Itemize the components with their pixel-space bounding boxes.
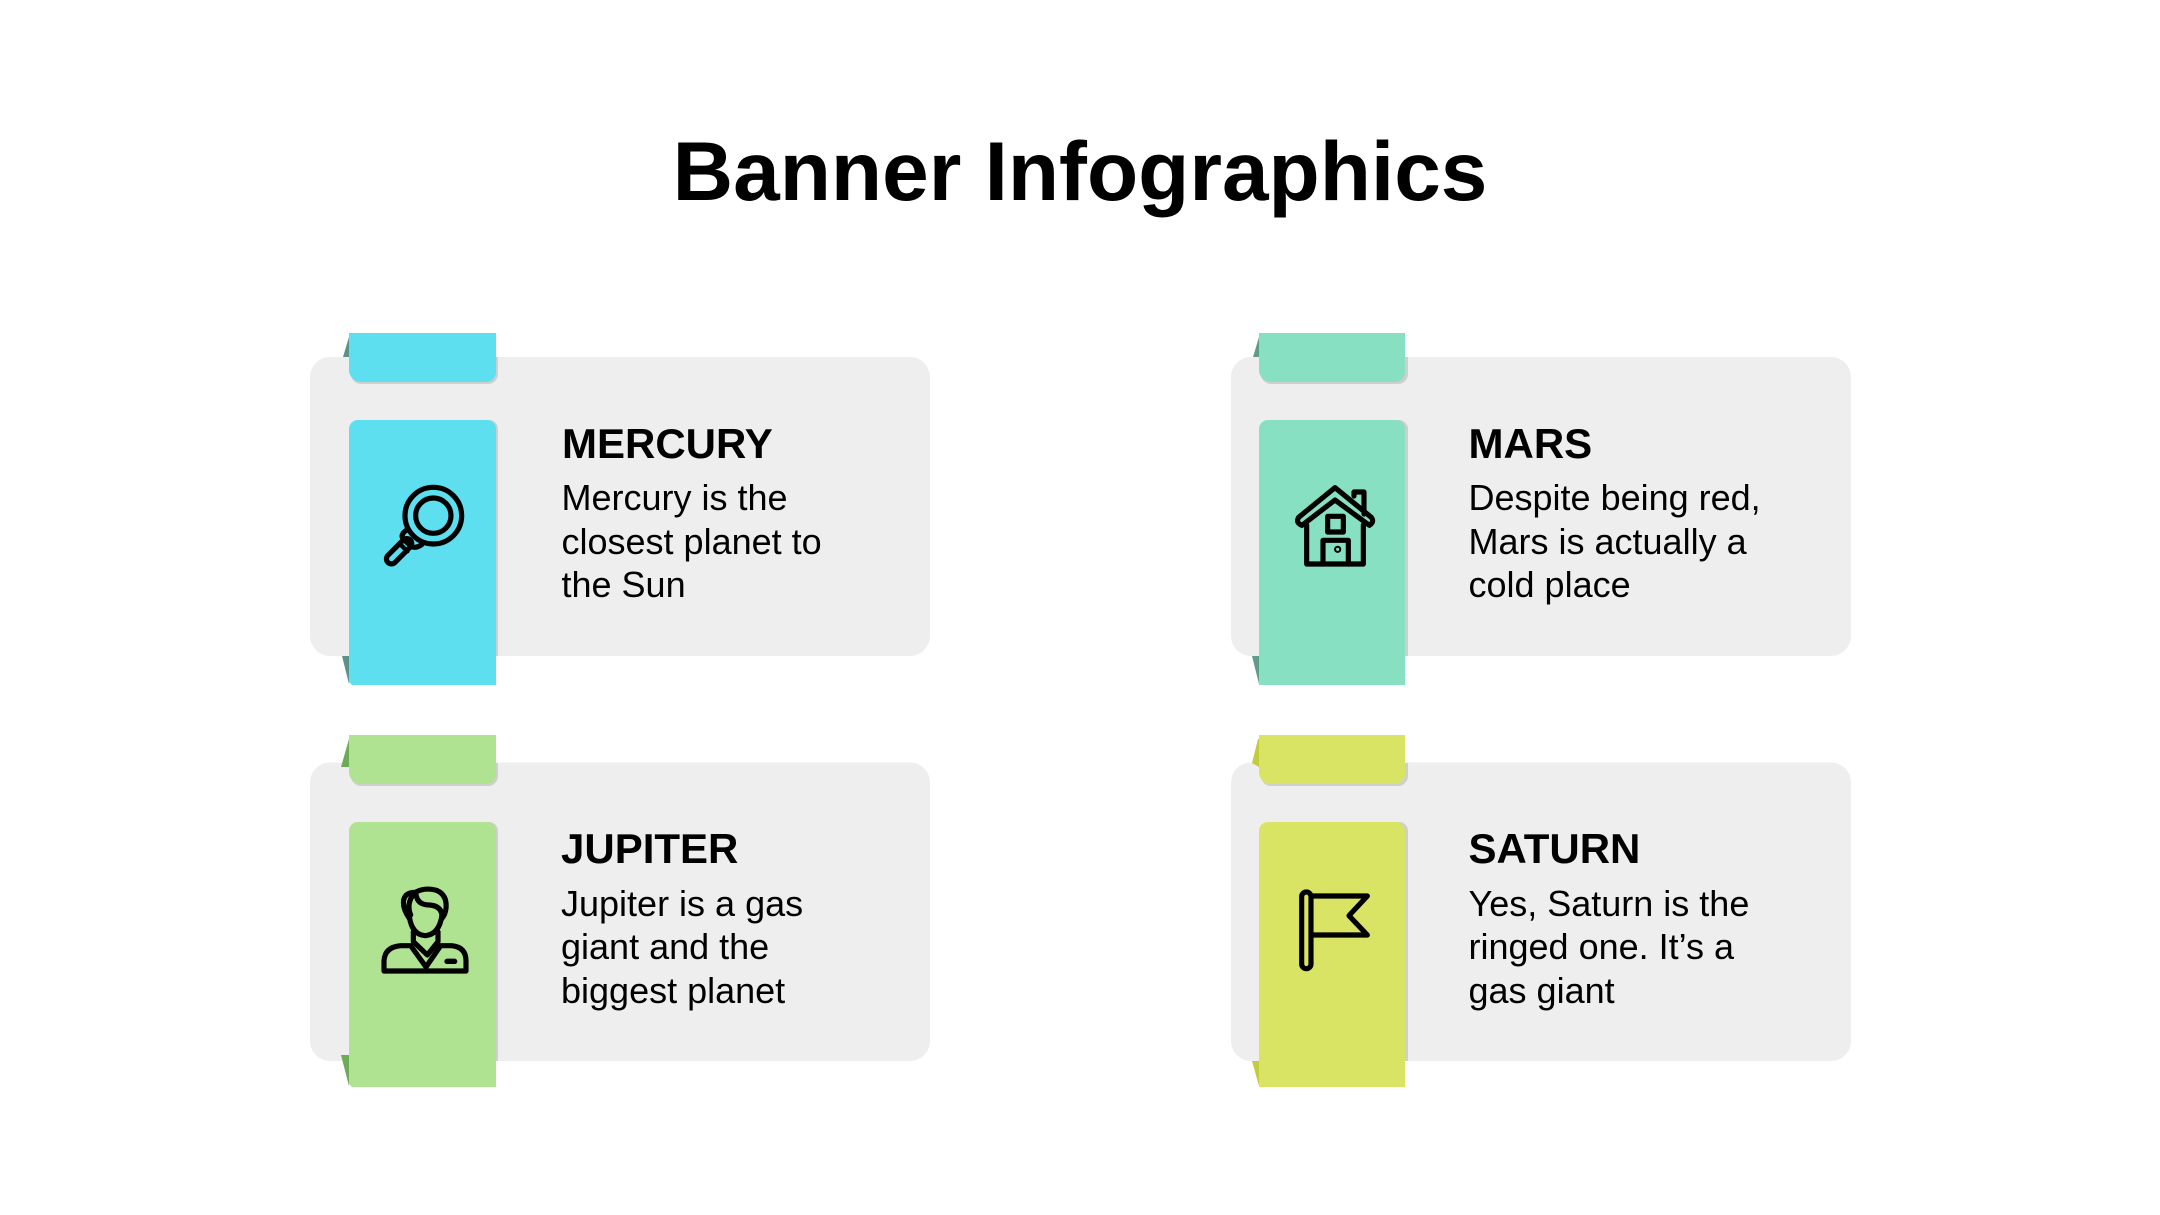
ribbon tab: saturn: [1259, 735, 1405, 784]
panel: mars: [1231, 333, 1851, 685]
ribbon fold bottom: jupiter: [341, 1055, 349, 1086]
text: jupiter: biggest planet: [561, 970, 785, 1011]
ribbon shadow: mars: [1261, 357, 1408, 656]
text: jupiter: giant and the: [561, 926, 769, 967]
ribbon shadow: mercury: [351, 357, 498, 656]
ribbon fold bottom: mercury: [342, 656, 349, 684]
text: saturn: gas giant: [1468, 970, 1615, 1011]
text: mercury: Mercury is the: [562, 477, 788, 518]
text: saturn: Yes, Saturn is the: [1468, 883, 1749, 924]
ribbon fold bottom: saturn: [1252, 1061, 1259, 1086]
text: mars: Despite being red,: [1468, 477, 1761, 518]
ribbon band: mars: [1259, 420, 1405, 685]
ribbon tab: jupiter: [349, 735, 496, 784]
text: mercury: closest planet to: [562, 521, 822, 562]
icon: house: [1298, 488, 1373, 564]
heading: mercury: MERCURY: [562, 420, 773, 467]
text: saturn: ringed one. It’s a: [1468, 926, 1735, 967]
icon: person: [384, 889, 466, 971]
card background: mars: [1231, 357, 1851, 656]
text: mercury: the Sun: [562, 564, 686, 605]
card background: jupiter: [310, 762, 930, 1061]
icon: flag: [1302, 892, 1367, 969]
icon: magnifier: [384, 487, 462, 566]
ribbon tab: mercury: [349, 333, 496, 382]
ribbon tab: mars: [1259, 333, 1405, 382]
ribbon fold bottom: mars: [1252, 656, 1259, 684]
ribbon band: jupiter: [349, 822, 496, 1087]
card background: saturn: [1231, 762, 1851, 1061]
ribbon fold top: saturn: [1252, 739, 1259, 767]
title: Banner Infographics: [673, 124, 1487, 218]
text: mars: cold place: [1468, 564, 1631, 605]
heading: saturn: SATURN: [1468, 825, 1640, 872]
ribbon fold top: mars: [1253, 337, 1259, 357]
text: jupiter: Jupiter is a gas: [561, 883, 803, 924]
panel: jupiter: [310, 735, 930, 1087]
panel: saturn: [1231, 735, 1851, 1087]
heading: jupiter: JUPITER: [561, 825, 738, 872]
ribbon shadow: jupiter: [351, 763, 498, 1061]
ribbon fold top: jupiter: [341, 739, 349, 767]
ribbon fold top: mercury: [343, 337, 349, 357]
ribbon band: mercury: [349, 420, 496, 685]
text: mars: Mars is actually a: [1468, 521, 1748, 562]
heading: mars: MARS: [1468, 420, 1592, 467]
panel: mercury: [310, 333, 930, 685]
ribbon shadow: saturn: [1261, 763, 1408, 1061]
ribbon band: saturn: [1259, 822, 1405, 1087]
card background: mercury: [310, 357, 930, 656]
